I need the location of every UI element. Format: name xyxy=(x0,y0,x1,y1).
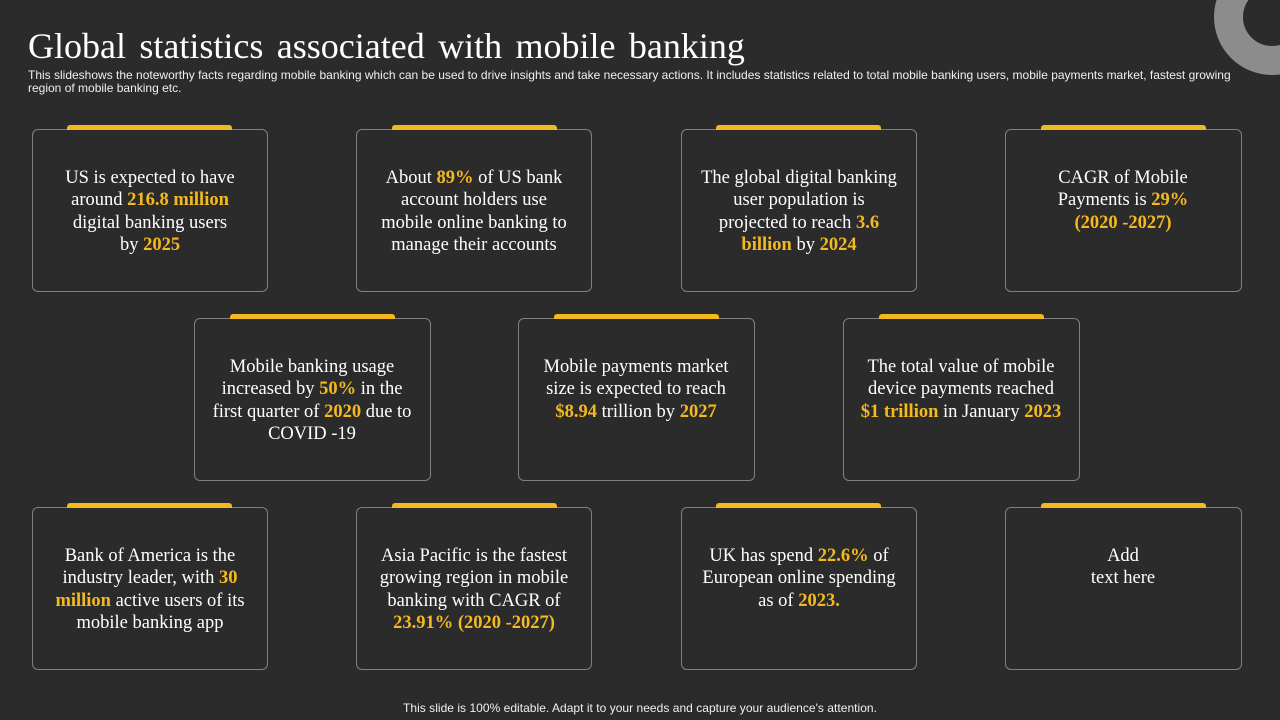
panel: usage increase during COVID-19: Mobile banking usage xyxy=(230,357,394,377)
panel: Asia Pacific growth: 23.91% (2020 -2027) xyxy=(393,613,555,633)
panel: Asia Pacific growth: growing region in mobile xyxy=(380,568,568,588)
footer note: This slide is 100% editable. Adapt it to your needs and capture your audience's attention. xyxy=(403,701,877,715)
panel: usage increase during COVID-19: COVID -19 xyxy=(268,424,356,444)
subtitle description xyxy=(28,68,1231,95)
panel: UK online spending: as of 2023. xyxy=(758,591,840,611)
panel: CAGR of mobile payments: (2020 -2027) xyxy=(1074,213,1172,233)
panel: US digital banking users: US is expected to have xyxy=(65,168,235,188)
panel: global user population: The global digital banking xyxy=(701,168,897,188)
panel: Bank of America: mobile banking app xyxy=(77,613,223,633)
panel: US bank account holders xyxy=(356,125,592,292)
panel: placeholder text: text here xyxy=(1091,568,1155,588)
decorative ring: top right xyxy=(1214,0,1280,75)
panel: Bank of America xyxy=(32,503,268,670)
panel: total value of device payments xyxy=(843,314,1080,481)
panel: total value of device payments: The total value of mobile xyxy=(868,357,1054,377)
subtitle description: region of mobile banking etc. xyxy=(28,81,181,95)
panel: Bank of America: Bank of America is the xyxy=(65,546,235,566)
panel: CAGR of mobile payments: Payments is 29% xyxy=(1058,190,1188,210)
panel: global user population xyxy=(681,125,917,292)
panel: Asia Pacific growth: Asia Pacific is the fastest xyxy=(381,546,567,566)
panel: UK online spending xyxy=(681,503,917,670)
panel: placeholder text: Add xyxy=(1107,546,1139,566)
panel: usage increase during COVID-19 xyxy=(194,314,431,481)
panel: Bank of America: million active users of its xyxy=(55,591,245,611)
panel: Bank of America: industry leader, with 30 xyxy=(62,568,237,588)
panel: US bank account holders: mobile online banking to xyxy=(381,213,567,233)
panel: global user population: billion by 2024 xyxy=(741,235,857,255)
title: Global statistics associated with mobile banking xyxy=(28,26,745,66)
panel: US bank account holders: About 89% of US bank xyxy=(386,168,562,188)
panel: usage increase during COVID-19: increased by 50% in the xyxy=(222,379,402,399)
panel: Asia Pacific growth xyxy=(356,503,592,670)
panel: US digital banking users: around 216.8 million xyxy=(71,190,229,210)
panel: US digital banking users: by 2025 xyxy=(120,235,180,255)
panel: CAGR of mobile payments xyxy=(1005,125,1242,292)
panel: US bank account holders: manage their accounts xyxy=(391,235,557,255)
panel: mobile payments market size: $8.94 trillion by 2027 xyxy=(555,402,717,422)
panel: Asia Pacific growth: banking with CAGR of xyxy=(387,591,561,611)
panel: CAGR of mobile payments: CAGR of Mobile xyxy=(1058,168,1188,188)
panel: global user population: projected to reach 3.6 xyxy=(719,213,879,233)
panel: placeholder text xyxy=(1005,503,1242,670)
panel: US digital banking users xyxy=(32,125,268,292)
panel: global user population: user population is xyxy=(733,190,865,210)
panel: US digital banking users: digital banking users xyxy=(73,213,227,233)
panel: total value of device payments: device payments reached xyxy=(868,379,1054,399)
panel: mobile payments market size: Mobile payments market xyxy=(544,357,728,377)
panel: US bank account holders: account holders use xyxy=(401,190,547,210)
panel: usage increase during COVID-19: first quarter of 2020 due to xyxy=(213,402,411,422)
panel: UK online spending: European online spending xyxy=(702,568,896,588)
panel: mobile payments market size: size is expected to reach xyxy=(546,379,726,399)
subtitle description: This slideshows the noteworthy facts regarding mobile banking which can be used to drive insights and take necessary actions. It includes statistics related to total mobile banking users, mobile payments market, fastest growing xyxy=(28,68,1231,82)
panel: UK online spending: UK has spend 22.6% of xyxy=(709,546,889,566)
panel: total value of device payments: $1 trillion in January 2023 xyxy=(861,402,1061,422)
panel: mobile payments market size xyxy=(518,314,755,481)
